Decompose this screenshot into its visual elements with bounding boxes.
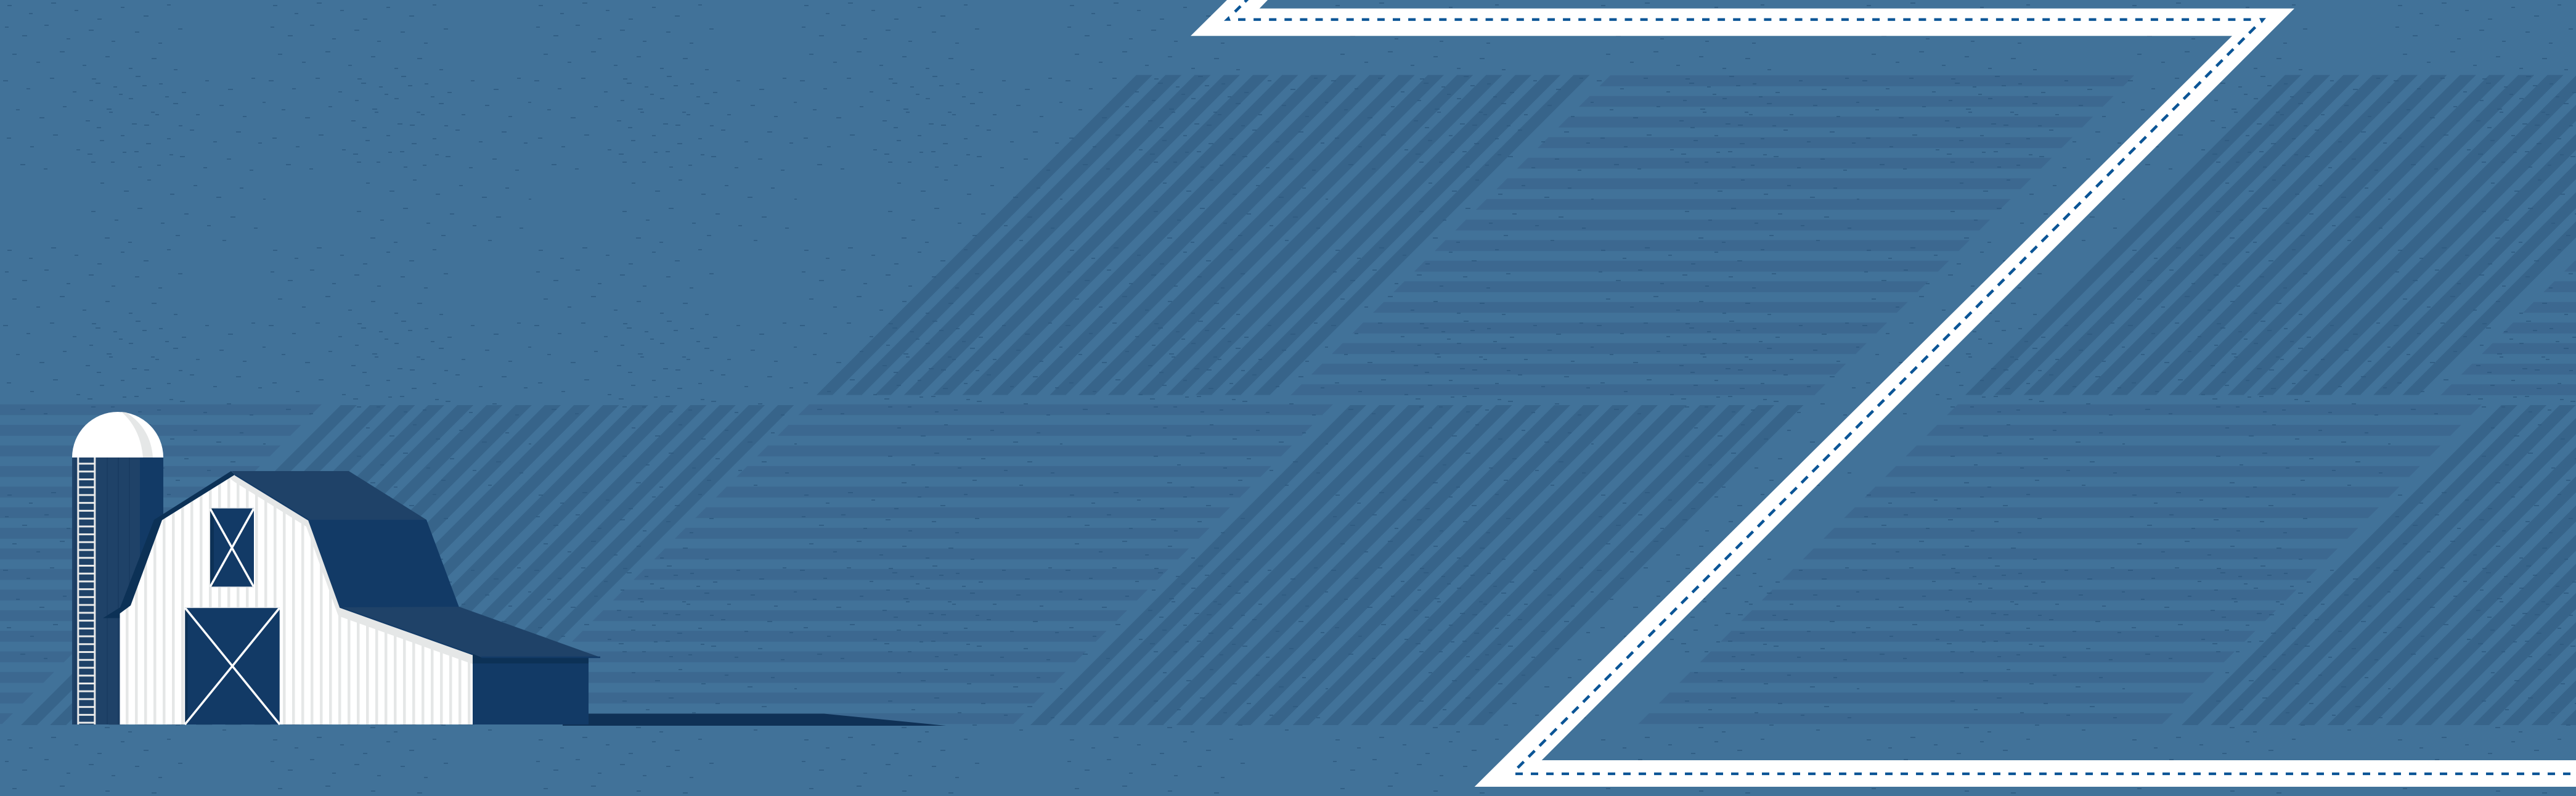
field: lower horizontal furrows, right [1638, 404, 2482, 724]
field: lower diagonal furrows, far right [2182, 405, 2576, 725]
field: lower horizontal furrows, far left [0, 404, 322, 724]
lean-to roof [340, 607, 600, 657]
field: upper horizontal furrows, centre [1290, 75, 2134, 395]
silo dome [72, 412, 163, 457]
silo [72, 412, 163, 724]
silo ladder [77, 457, 96, 724]
barn [103, 471, 600, 724]
lean-to roof edge [481, 657, 600, 658]
field: lower horizontal furrows, centre left [489, 404, 1333, 724]
left roof trim [103, 471, 235, 618]
field: upper diagonal furrows, right [1965, 75, 2576, 395]
barn shadow on ground [563, 714, 946, 726]
field: lower diagonal furrows, centre [1030, 405, 1803, 725]
wall edge shading [230, 475, 473, 664]
lower roof side [309, 520, 459, 607]
upper roof [232, 471, 426, 520]
field: upper horizontal furrows, far right [2440, 75, 2576, 395]
silo body [72, 457, 163, 724]
Z-shaped road [1191, 0, 2576, 787]
lean-to eave shadow [473, 654, 589, 663]
roof edge line [235, 475, 473, 655]
road centre dashes [1224, 0, 2576, 774]
road surface [1191, 0, 2576, 787]
lean-to wall [473, 655, 589, 724]
barn front wall [120, 475, 473, 724]
barn door [185, 607, 280, 724]
loft window [210, 508, 254, 587]
field: upper diagonal furrows, left [817, 75, 1590, 395]
field: lower diagonal furrows behind barn [21, 405, 794, 725]
